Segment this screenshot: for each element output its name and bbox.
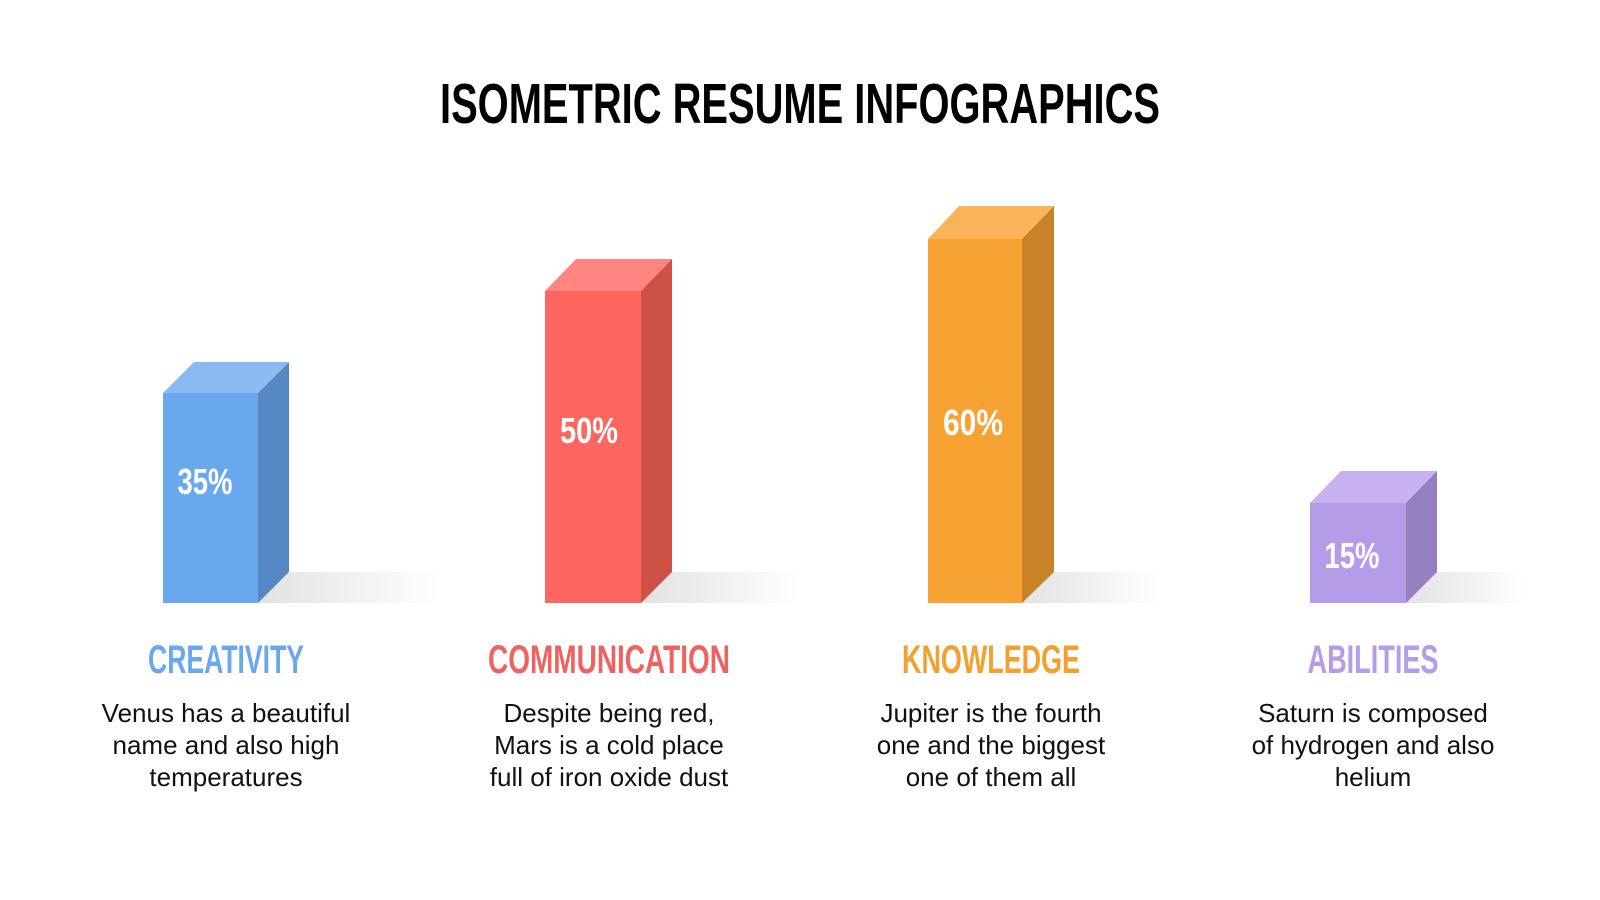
text: knowledge description: Jupiter is the fourth [880,698,1102,728]
text: communication description: full of iron oxide dust [490,762,729,792]
text: communication description: Despite being red, [503,698,715,728]
heading: knowledge: KNOWLEDGE [902,638,1080,682]
bar: knowledge 60% [928,206,1160,603]
panel: abilities [1252,471,1525,792]
title: ISOMETRIC RESUME INFOGRAPHICS [440,72,1160,136]
text: knowledge description: one and the biggest [877,730,1106,760]
text: communication description: Mars is a cold place [494,730,724,760]
text: creativity description: temperatures [149,762,303,792]
panel: creativity [102,362,440,792]
text: creativity description: Venus has a beautiful [102,698,350,728]
heading: abilities: ABILITIES [1308,638,1438,682]
bar: abilities 15%: 15% [1324,535,1380,576]
heading: communication: COMMUNICATION [488,638,730,682]
text: creativity description: name and also high [113,730,339,760]
bar: communication 50% [545,259,800,603]
panel: communication [488,259,800,792]
panel: knowledge [877,206,1160,792]
text: abilities description: Saturn is composed [1258,698,1488,728]
bar: creativity 35% [163,362,440,603]
text: abilities description: helium [1335,762,1411,792]
text: knowledge description: one of them all [906,762,1076,792]
bar: abilities 15% [1310,471,1525,603]
bar: knowledge 60%: 60% [943,402,1003,443]
heading: creativity: CREATIVITY [148,638,304,682]
bar: communication 50%: 50% [560,410,618,451]
bar: creativity 35%: 35% [178,461,232,502]
text: abilities description: of hydrogen and also [1252,730,1494,760]
